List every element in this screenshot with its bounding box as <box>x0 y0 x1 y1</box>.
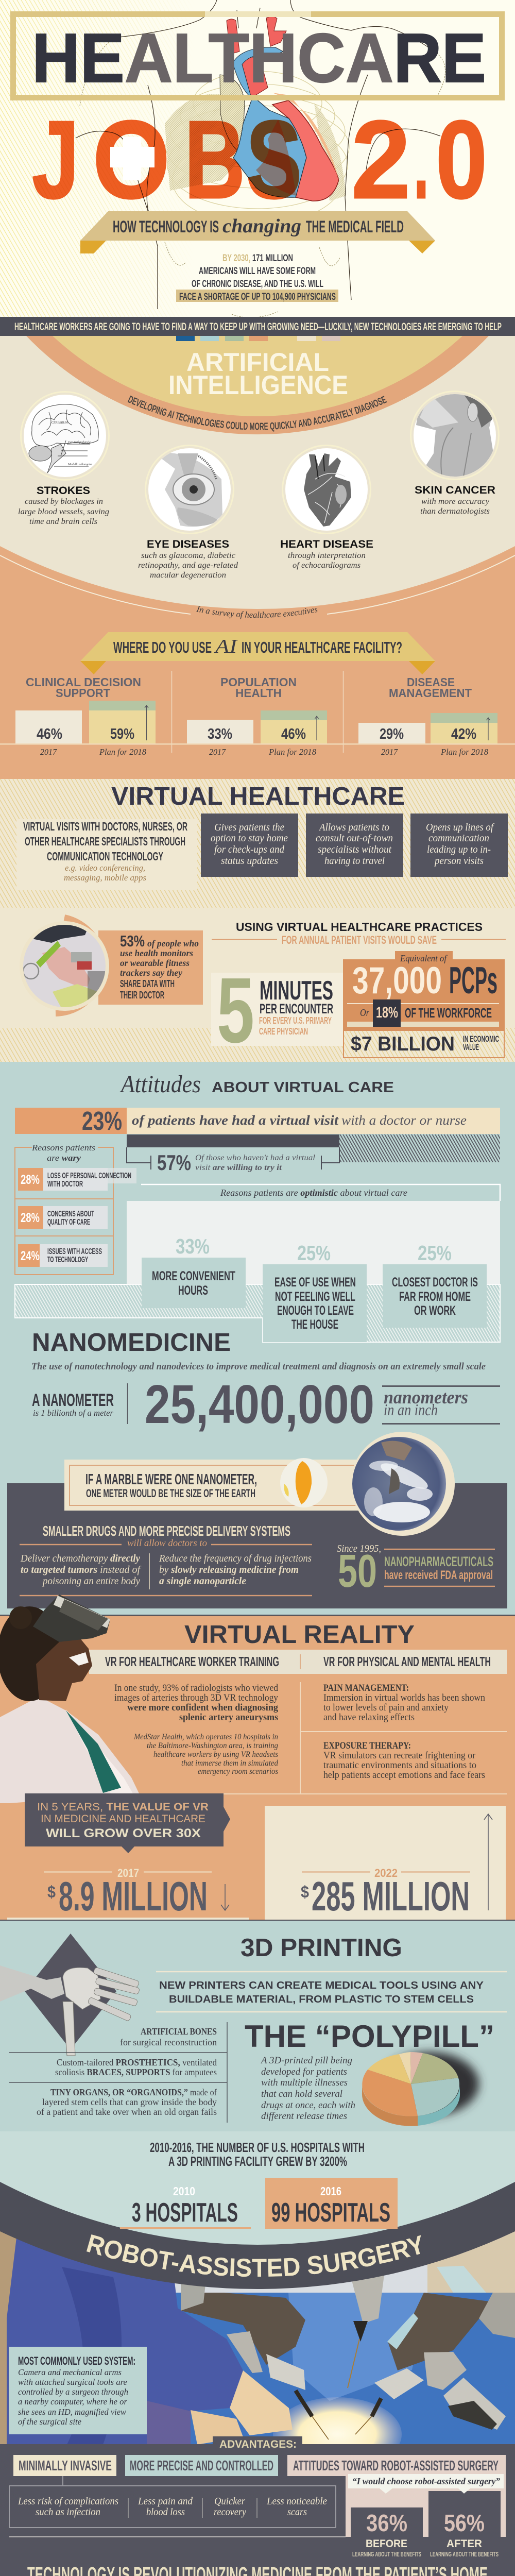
text block: eye diseases: such as glaucoma, diabetic <box>141 551 235 560</box>
text block: polypill description: different release times <box>261 2111 347 2122</box>
text block: physical and mental health: EXPOSURE THERAPY: <box>323 1740 411 1751</box>
panel: teal attitudes and nanomedicine background <box>0 1062 515 1615</box>
text block: worker training: that immerse them in simulated <box>181 1759 278 1768</box>
chart: clinical decision support: SUPPORT <box>56 686 110 700</box>
text block: heart disease: HEART DISEASE <box>280 538 373 550</box>
chart: attitudes toward robot-assisted surgery <box>287 2455 506 2558</box>
text block: worker training: were more confident when diagnosing <box>127 1702 278 1713</box>
stat: 2016 99 hospitals: 99 HOSPITALS <box>271 2198 390 2228</box>
chart: clinical decision support: CLINICAL DECISION <box>26 675 141 689</box>
text block: smaller drugs: will allow doctors to <box>127 1538 207 1549</box>
heading: virtual reality: VIRTUAL REALITY <box>184 1621 415 1649</box>
row: issues with access: ISSUES WITH ACCESS <box>47 1247 102 1256</box>
panel: advantages background <box>0 2444 515 2576</box>
column: ease of use: 25% <box>297 1241 331 1265</box>
icon: brain: Medulla oblongata <box>67 463 92 466</box>
icon: heart <box>282 445 371 534</box>
chart: population health: HEALTH <box>235 686 282 700</box>
row: loss of personal connection <box>18 1168 136 1191</box>
stat: 2017 $8.9 million: 2017 <box>117 1867 139 1879</box>
list: less risk benefits: Less risk of complications <box>18 2496 118 2507</box>
heading: the polypill: THE “POLYPILL” <box>245 2019 494 2054</box>
panel: most commonly used system: a nearby computer, where he or <box>18 2397 127 2406</box>
text block: smaller drugs: by slowly releasing medicine from <box>159 1564 299 1575</box>
stat: 25,400,000 nanometers in an inch: 25,400,000 <box>145 1374 374 1435</box>
text block: skin cancer <box>415 484 495 516</box>
panel: gives patients option: option to stay home <box>211 833 288 844</box>
stat: 2017 $8.9 million: $ <box>47 1883 56 1901</box>
panel: AI section background <box>0 336 515 779</box>
panel: gives patients option: Gives patients the <box>214 822 284 833</box>
chart: disease management: 42% <box>451 726 476 742</box>
row: issues with access: TO TECHNOLOGY <box>47 1256 88 1264</box>
icon: woman wearing VR headset <box>0 1595 139 1803</box>
text block: virtual visits <box>23 820 187 883</box>
stat: 25,400,000 nanometers in an inch <box>32 1374 500 1435</box>
icon: brain: CEREBRUM <box>52 421 68 425</box>
chart: attitudes toward robot-assisted surgery: 56% <box>444 2510 485 2536</box>
chart: disease management: MANAGEMENT <box>389 686 472 700</box>
row: loss of personal connection: WITH DOCTOR <box>47 1180 83 1189</box>
text block: medical tools list: layered stem cells that can grow inside the body <box>42 2097 217 2107</box>
bar: 23% had a virtual visit: with a doctor or nurse <box>341 1113 467 1128</box>
title: HEALTHCARE frame: HEALTHCARE <box>32 19 486 97</box>
heading: 3D printing: 3D PRINTING <box>241 1934 402 1962</box>
column: closest doctor far: FAR FROM HOME <box>399 1290 471 1304</box>
banner: where do you use AI: IN YOUR HEALTHCARE FACILITY? <box>242 638 402 656</box>
text block: heart disease: of echocardiograms <box>293 561 360 570</box>
text block: physical and mental health: Immersion in virtual worlds has been shown <box>323 1692 485 1703</box>
banner: where do you use AI <box>80 632 435 674</box>
list: less risk benefits <box>9 2476 346 2537</box>
text block: hospitals with 3D printing: 2010-2016, THE NUMBER OF U.S. HOSPITALS WITH <box>150 2140 365 2155</box>
callout: marble and earth comparison: IF A MARBLE WERE ONE NANOMETER, <box>85 1471 257 1488</box>
text block: chronic disease intro: BY 2030, 171 MILLION <box>222 253 293 264</box>
text block: skin cancer: than dermatologists <box>420 507 490 516</box>
panel: most commonly used system: Camera and mechanical arms <box>18 2367 122 2377</box>
text block: 53% share data <box>120 932 199 1001</box>
stat: 50 nanopharmaceuticals <box>337 1543 495 1597</box>
panel: consult out-of-town specialists <box>306 814 403 877</box>
row: concerns about quality: 28% <box>21 1211 40 1225</box>
row: concerns about quality: QUALITY OF CARE <box>47 1218 90 1227</box>
panel: VR heading band <box>89 1650 507 1674</box>
column: ease of use: EASE OF USE WHEN <box>274 1275 356 1290</box>
chart: clinical decision support: 2017 <box>40 747 57 757</box>
panel: reasons patients are wary: Reasons patients <box>31 1143 95 1153</box>
stat: 37,000 PCPs equivalent: 18% <box>376 1004 398 1021</box>
chart: attitudes toward robot-assisted surgery: “I would choose robot-assisted surgery” <box>352 2476 500 2486</box>
callout: value of VR will grow <box>25 1793 230 1853</box>
text block: eye diseases: macular degeneration <box>150 571 226 580</box>
text block: physical and mental health <box>224 1682 507 1794</box>
stat: 2017 $8.9 million <box>7 1867 249 1920</box>
panel: virtual reality background <box>0 1615 515 1920</box>
text block: physical and mental health: traumatic environments and situations to <box>323 1760 476 1771</box>
title: JOBS 2.0: 0 <box>436 97 487 222</box>
bar: 57% willing to try: 57% <box>157 1150 191 1175</box>
list: less risk benefits: Less pain and <box>138 2496 193 2507</box>
banner: subtitle ribbon: THE MEDICAL FIELD <box>306 217 404 236</box>
heading: nanomedicine <box>31 1329 486 1372</box>
chart: clinical decision support: 59% <box>110 726 134 742</box>
text block: eye diseases: retinopathy, and age-related <box>138 561 238 570</box>
stat: 25,400,000 nanometers in an inch: A NANOMETER <box>32 1391 114 1410</box>
bar: 57% willing to try: Of those who haven't had a virtual <box>195 1154 316 1162</box>
text block: worker training: MedStar Health, which operates 10 hospitals in <box>133 1733 278 1741</box>
column: more convenient hours: MORE CONVENIENT <box>152 1269 235 1283</box>
text block: worker training <box>114 1683 278 1776</box>
text block: 53% share data: or wearable fitness <box>120 958 190 968</box>
stat: 5 minutes per encounter: MINUTES <box>260 976 333 1006</box>
column: closest doctor far: 25% <box>418 1241 452 1265</box>
stat: 2016 99 hospitals: 2016 <box>320 2184 341 2198</box>
heading: advantages tab: ADVANTAGES: <box>219 2438 297 2450</box>
chart: disease management: DISEASE <box>407 675 455 689</box>
icon: marble <box>280 1458 328 1507</box>
text block: medical tools list: TINY ORGANS, OR “ORGANOIDS,” made of <box>50 2087 217 2097</box>
row: concerns about quality <box>18 1206 108 1229</box>
panel: consult out-of-town specialists: having to travel <box>324 855 385 867</box>
text block: chronic disease intro: OF CHRONIC DISEASE, AND THE U.S. WILL <box>192 279 323 290</box>
callout: value of VR will grow: WILL GROW OVER 30X <box>46 1826 201 1840</box>
chart: population health: 2017 <box>209 747 226 757</box>
column: ease of use: THE HOUSE <box>291 1317 338 1332</box>
heading: Artificial Intelligence: INTELLIGENCE <box>168 370 348 400</box>
text block: chronic disease intro <box>176 253 338 302</box>
stat: 50 nanopharmaceuticals: Since 1995, <box>337 1543 381 1554</box>
text block: new printers <box>156 1972 507 2012</box>
panel: most commonly used system <box>9 2347 147 2434</box>
panel: most commonly used system: controlled by a surgeon through <box>18 2387 128 2397</box>
row: loss of personal connection: LOSS OF PERSONAL CONNECTION <box>47 1172 131 1180</box>
stat: 5 minutes per encounter: CARE PHYSICIAN <box>259 1026 308 1037</box>
stat: 2010 3 hospitals <box>120 2184 251 2229</box>
column: ease of use: ENOUGH TO LEAVE <box>277 1303 354 1318</box>
icon: eye <box>145 445 234 534</box>
icon: neck and skin <box>410 391 500 480</box>
text block: eye diseases <box>138 538 238 580</box>
text block: smaller drugs <box>20 1523 312 1596</box>
colour chips under bar <box>176 336 340 341</box>
text block: polypill description: with multiple illnesses <box>261 2077 348 2088</box>
callout: marble and earth comparison: ONE METER WOULD BE THE SIZE OF THE EARTH <box>86 1487 255 1500</box>
panel: most commonly used system: MOST COMMONLY USED SYSTEM: <box>18 2354 135 2367</box>
text block: polypill description: A 3D-printed pill being <box>260 2055 352 2066</box>
panel: consult out-of-town specialists: Allows patients to <box>318 822 389 833</box>
chart: attitudes toward robot-assisted surgery: BEFORE <box>366 2538 407 2550</box>
stat: 2022 $285 million: $ <box>301 1883 309 1901</box>
curved text: developing AI technologies: DEVELOPING AI TECHNOLOGIES COULD MORE QUICKLY AND ACCURATELY DIAGNOSE <box>128 396 387 432</box>
text block: 53% share data: of people who <box>147 938 199 948</box>
callout: value of VR will grow: IN MEDICINE AND HEALTHCARE <box>41 1813 205 1825</box>
bar: 23% had a virtual visit <box>15 1106 500 1136</box>
column: more convenient hours: HOURS <box>178 1283 208 1298</box>
chart: population health: 33% <box>208 726 232 742</box>
row: loss of personal connection: 28% <box>21 1173 40 1187</box>
text block: medical tools list: scoliosis BRACES, SUPPORTS for amputees <box>55 2067 217 2077</box>
panel: consult out-of-town specialists: consult out-of-town <box>316 833 393 844</box>
text block: strokes: large blood vessels, saving <box>18 507 109 516</box>
text block: chronic disease intro: FACE A SHORTAGE OF UP TO 104,900 PHYSICIANS <box>179 292 336 302</box>
panel: reasons patients are optimistic: Reasons patients are optimistic about virtual care <box>220 1188 407 1198</box>
row: issues with access: 24% <box>21 1249 40 1263</box>
chart: attitudes toward robot-assisted surgery: AFTER <box>447 2538 482 2550</box>
text block: 53% share data: trackers say they <box>120 968 183 978</box>
text block: virtual visits: messaging, mobile apps <box>64 873 146 883</box>
text block: polypill description <box>260 2055 355 2122</box>
banner: where do you use AI: AI <box>213 636 238 657</box>
text block: heart disease <box>280 538 373 570</box>
text block: 53% share data: THEIR DOCTOR <box>120 990 164 1001</box>
curved text: survey of healthcare executives: In a survey of healthcare executives <box>196 606 317 619</box>
text block: skin cancer: with more accuracy <box>421 497 490 506</box>
stat: 5 minutes per encounter <box>211 959 343 1062</box>
panel: most commonly used system: of the surgical site <box>18 2417 81 2427</box>
text block: worker training: In one study, 93% of radiologists who viewed <box>114 1683 278 1693</box>
stat: $7 billion economic value <box>344 1030 504 1058</box>
panel: reasons patients are wary: are wary <box>47 1153 81 1163</box>
list: less risk benefits: scars <box>287 2506 307 2518</box>
text block: virtual visits: e.g. video conferencing, <box>65 863 145 873</box>
text block: 53% share data: SHARE DATA WITH <box>120 978 175 990</box>
bar: 57% willing to try: visit are willing to try it <box>195 1163 282 1172</box>
panel: gives patients option: status updates <box>221 855 278 867</box>
text block: physical and mental health: VR simulators can recreate frightening or <box>323 1750 476 1761</box>
title: JOBS 2.0: B <box>184 97 245 222</box>
text block: 53% share data: 53% <box>120 932 145 950</box>
icon: brain: Cervical peduncle <box>68 441 91 444</box>
label: more precise and controlled: MORE PRECISE AND CONTROLLED <box>130 2458 273 2473</box>
heading: attitudes about virtual care: ABOUT VIRTUAL CARE <box>212 1079 394 1096</box>
heading: Artificial Intelligence: ARTIFICIAL <box>186 348 329 377</box>
icon: brain <box>20 391 110 481</box>
chart: population health: Plan for 2018 <box>268 747 316 757</box>
bar: 23% had a virtual visit: of patients have had a virtual visit <box>132 1113 339 1128</box>
chart: clinical decision support: Plan for 2018 <box>99 747 146 757</box>
text block: chronic disease intro: AMERICANS WILL HAVE SOME FORM <box>199 266 316 277</box>
text block: physical and mental health: to lower levels of pain and anxiety <box>323 1702 449 1713</box>
stat: 5 minutes per encounter: 5 <box>217 959 254 1062</box>
text block: smaller drugs: SMALLER DRUGS AND MORE PRECISE DELIVERY SYSTEMS <box>43 1523 290 1539</box>
title: JOBS 2.0: S <box>246 97 302 222</box>
panel: dark robot-assisted surgery arc <box>0 2131 515 2289</box>
callout: marble and earth comparison <box>64 1432 455 1536</box>
text block: physical and mental health: PAIN MANAGEMENT: <box>323 1683 409 1693</box>
chart: disease management: 2017 <box>381 747 398 757</box>
chart: disease management: 29% <box>380 726 404 742</box>
chart: disease management <box>358 675 497 757</box>
chart: attitudes toward robot-assisted surgery: 36% <box>366 2510 407 2536</box>
label: minimally invasive: MINIMALLY INVASIVE <box>19 2458 112 2473</box>
icon: anatomical torso illustration <box>76 0 445 317</box>
panel: header background <box>0 0 515 317</box>
text block: worker training: images of arteries through 3D VR technology <box>114 1692 278 1703</box>
text block: virtual visits: VIRTUAL VISITS WITH DOCTORS, NURSES, OR <box>23 820 187 833</box>
text block: virtual visits: COMMUNICATION TECHNOLOGY <box>47 850 163 863</box>
text block: medical tools list: ARTIFICIAL BONES <box>141 2026 217 2037</box>
text block: virtual visits: OTHER HEALTHCARE SPECIALISTS THROUGH <box>25 835 185 848</box>
heading: attitudes about virtual care <box>119 1071 394 1098</box>
panel: robot surgery photo <box>0 2215 515 2471</box>
label: minimally invasive <box>13 2455 116 2476</box>
text block: medical tools list: Custom-tailored PROSTHETICS, ventilated <box>57 2057 217 2067</box>
list: less risk benefits: Less noticeable <box>266 2496 327 2507</box>
text block: worker training: the Baltimore-Washington area, is training <box>147 1741 278 1750</box>
panel: dark nano delivery panel <box>7 1483 507 1608</box>
column: ease of use <box>263 1241 367 1342</box>
text block: medical tools list <box>9 2022 227 2123</box>
text block: strokes: caused by blockages in <box>25 497 103 506</box>
panel: most commonly used system: she sees an HD, magnified view <box>18 2407 127 2417</box>
heading: using virtual healthcare practices <box>212 920 506 946</box>
bar: 23% had a virtual visit: 23% <box>82 1106 122 1136</box>
panel: gives patients option: for check-ups and <box>214 844 285 855</box>
list: less risk benefits: such as infection <box>36 2506 100 2518</box>
chart: population health: POPULATION <box>220 675 297 689</box>
banner: subtitle ribbon <box>80 211 435 253</box>
text block: smaller drugs: Deliver chemotherapy directly <box>20 1553 140 1564</box>
column: more convenient hours: 33% <box>176 1234 210 1258</box>
list: less risk benefits: Quicker <box>214 2496 245 2507</box>
text block: medical tools list: of a patient and take over when an old organ fails <box>37 2107 217 2117</box>
text block: worker training: healthcare workers by using VR headsets <box>153 1750 278 1759</box>
panel: 3D printing background <box>0 1921 515 2131</box>
icon: earth <box>351 1432 455 1536</box>
heading: Artificial Intelligence <box>168 348 348 400</box>
text block: eye diseases: EYE DISEASES <box>147 538 229 550</box>
column: closest doctor far <box>383 1241 487 1328</box>
text block: hospitals with 3D printing: A 3D PRINTING FACILITY GREW BY 3200% <box>168 2154 347 2169</box>
banner: subtitle ribbon: HOW TECHNOLOGY IS <box>113 217 219 236</box>
text block: strokes <box>18 485 109 526</box>
text block: heart disease: through interpretation <box>288 551 366 560</box>
text block: worker training: emergency room scenarios <box>198 1767 278 1776</box>
title: JOBS 2.0: . <box>414 97 429 222</box>
chart: population health: 46% <box>281 726 306 742</box>
stat: 37,000 PCPs equivalent <box>343 951 505 1030</box>
panel: opens lines of communication: leading up to in- <box>427 844 491 855</box>
panel: virtual healthcare background <box>0 779 515 1062</box>
callout: value of VR will grow: IN 5 YEARS, THE VALUE OF VR <box>37 1801 209 1813</box>
stat: 37,000 PCPs equivalent: Equivalent of <box>400 953 448 963</box>
text block: skin cancer: SKIN CANCER <box>415 484 495 496</box>
text block: polypill description: developed for patients <box>261 2066 347 2077</box>
chart: disease management: Plan for 2018 <box>440 747 488 757</box>
column: ease of use: NOT FEELING WELL <box>275 1290 355 1304</box>
text block: smaller drugs: Reduce the frequency of drug injections <box>159 1553 312 1564</box>
bar: 57% willing to try <box>127 1134 500 1175</box>
row: issues with access <box>18 1244 108 1267</box>
chart: population health <box>187 675 327 757</box>
panel: opens lines of communication: Opens up lines of <box>426 822 494 833</box>
stat: 2010 3 hospitals: 2010 <box>173 2184 195 2198</box>
stat: 2017 $8.9 million: 8.9 MILLION <box>59 1873 208 1919</box>
title: JOBS 2.0: J <box>32 97 79 222</box>
text block: physical and mental health: help patients accept emotions and face fears <box>323 1770 485 1781</box>
heading bar: keep up with growing need <box>0 317 515 336</box>
text block: polypill description: that can hold several <box>261 2089 342 2099</box>
stat: 2010 3 hospitals: 3 HOSPITALS <box>132 2198 238 2228</box>
stat: $7 billion economic value: VALUE <box>463 1042 479 1052</box>
stat: 50 nanopharmaceuticals: 50 <box>338 1546 377 1597</box>
stat: 5 minutes per encounter: PER ENCOUNTER <box>260 1001 333 1016</box>
text block: 53% share data: use health monitors <box>120 948 193 958</box>
stat: 5 minutes per encounter: FOR EVERY U.S. PRIMARY <box>259 1015 332 1026</box>
panel: consult out-of-town specialists: specialists without <box>318 844 391 855</box>
panel: opens lines of communication <box>410 814 508 877</box>
heading: virtual healthcare: VIRTUAL HEALTHCARE <box>111 783 405 810</box>
text block: smaller drugs: a single nanoparticle <box>159 1575 246 1587</box>
icon: medical cross in O <box>110 137 154 180</box>
panel: opens lines of communication: communication <box>428 833 489 844</box>
stat: 2022 $285 million: 2022 <box>374 1867 398 1879</box>
text block: smaller drugs: poisoning an entire body <box>42 1575 140 1587</box>
banner: where do you use AI: WHERE DO YOU USE <box>113 638 212 656</box>
panel: opens lines of communication: person visits <box>434 855 484 867</box>
stat: 2022 $285 million <box>265 1806 506 1920</box>
icon: robotic hand on diamond <box>0 1934 140 2056</box>
text block: new printers: NEW PRINTERS CAN CREATE MEDICAL TOOLS USING ANY <box>159 1980 484 1991</box>
chart: attitudes toward robot-assisted surgery: LEARNING ABOUT THE BENEFITS <box>352 2550 421 2558</box>
text block: polypill description: drugs at once, each with <box>261 2100 355 2111</box>
text block: strokes: time and brain cells <box>29 517 97 526</box>
text block: new printers: BUILDABLE MATERIAL, FROM PLASTIC TO STEM CELLS <box>169 1994 474 2005</box>
column: closest doctor far: OR WORK <box>414 1303 456 1318</box>
heading: using virtual healthcare practices: USING VIRTUAL HEALTHCARE PRACTICES <box>236 920 483 934</box>
chart: clinical decision support: 46% <box>37 726 62 742</box>
panel: gives patients option <box>201 814 298 877</box>
heading: nanomedicine: NANOMEDICINE <box>32 1329 231 1357</box>
list: less risk benefits: recovery <box>214 2506 246 2518</box>
panel: VR heading band: VR FOR HEALTHCARE WORKER TRAINING <box>105 1654 279 1669</box>
title: JOBS 2.0: 2 <box>351 97 410 222</box>
chart: polypill pie <box>362 2052 479 2126</box>
text block: worker training: splenic artery aneurysms <box>179 1712 278 1723</box>
row: concerns about quality: CONCERNS ABOUT <box>47 1210 94 1218</box>
text block: physical and mental health: and have relaxing effects <box>323 1712 415 1723</box>
stat: 25,400,000 nanometers in an inch: nanometers <box>384 1387 468 1408</box>
banner: subtitle ribbon: changing <box>222 215 301 237</box>
text block: strokes: STROKES <box>37 485 90 497</box>
text block: hospitals with 3D printing <box>150 2140 365 2169</box>
label: more precise and controlled <box>125 2455 278 2476</box>
stat: $7 billion economic value: $7 BILLION <box>351 1033 455 1055</box>
heading: robot-assisted surgery: ROBOT-ASSISTED SURGERY <box>87 2234 421 2277</box>
stat: 25,400,000 nanometers in an inch: is 1 billionth of a meter <box>33 1408 113 1418</box>
heading: nanomedicine: The use of nanotechnology and nanodevices to improve medical treatment and diagnosis on an extremely small scale <box>31 1361 486 1372</box>
title: JOBS 2.0 <box>32 97 487 222</box>
title: JOBS 2.0: O <box>93 97 170 222</box>
column: more convenient hours <box>142 1234 246 1308</box>
heading: attitudes about virtual care: Attitudes <box>119 1071 201 1098</box>
icon: wearable fitness tracker photo <box>20 918 203 1013</box>
stat: 37,000 PCPs equivalent: Or <box>360 1007 369 1019</box>
stat: 25,400,000 nanometers in an inch: in an inch <box>384 1400 438 1419</box>
stat: 2016 99 hospitals <box>265 2178 398 2229</box>
text block: smaller drugs: to targeted tumors instead of <box>21 1564 141 1575</box>
stat: 37,000 PCPs equivalent: 37,000 <box>352 960 442 1002</box>
panel: reasons patients are wary <box>15 1143 136 1275</box>
text block: medical tools list: for surgical reconstruction <box>120 2037 217 2047</box>
list: less risk benefits: blood loss <box>146 2506 185 2518</box>
panel: most commonly used system: with attached surgical tools are <box>18 2377 127 2387</box>
panel: reasons patients are optimistic <box>15 1184 500 1342</box>
chart: clinical decision support <box>15 675 156 757</box>
